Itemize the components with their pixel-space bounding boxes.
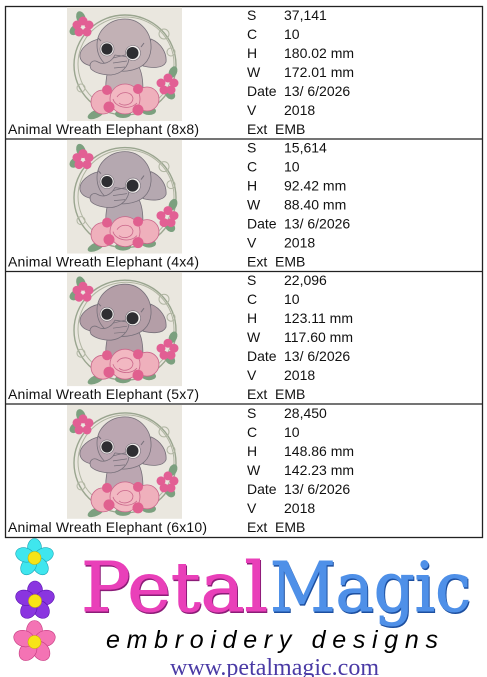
image: elephant wreath 6x10 bbox=[67, 405, 182, 519]
stats: design 6x10: 28,450 bbox=[284, 405, 327, 421]
stats: design 8x8: W bbox=[247, 64, 261, 80]
stats: design 4x4: 92.42 mm bbox=[284, 178, 346, 194]
stats: design 6x10: EMB bbox=[275, 519, 305, 535]
stats: design 8x8: V bbox=[247, 102, 257, 118]
stats: design 8x8: 180.02 mm bbox=[284, 45, 354, 61]
stats: design 4x4: EMB bbox=[275, 254, 305, 270]
logo: PetalMagic wordmark bbox=[81, 549, 471, 628]
stats: design 6x10: C bbox=[247, 424, 257, 440]
stats: design 5x7: S bbox=[247, 272, 256, 288]
stats: design 5x7: W bbox=[247, 329, 261, 345]
image: elephant wreath 5x7 bbox=[67, 272, 182, 387]
stats: design 4x4: Ext bbox=[247, 254, 267, 270]
stats: design 8x8: 37,141 bbox=[284, 7, 327, 23]
stats: design 5x7: 10 bbox=[284, 291, 300, 307]
stats: design 5x7: 22,096 bbox=[284, 272, 327, 288]
image: elephant wreath 4x4 bbox=[67, 140, 182, 254]
stats: design 4x4: Date bbox=[247, 216, 277, 232]
stats: design 6x10: 148.86 mm bbox=[284, 443, 354, 459]
stats: design 4x4 bbox=[247, 140, 350, 270]
panel: row 8x8 bbox=[8, 7, 354, 137]
stats: design 6x10: Ext bbox=[247, 519, 267, 535]
icon: cyan flower bbox=[14, 538, 55, 578]
stats: design 5x7: 2018 bbox=[284, 367, 315, 383]
stats: design 6x10: Date bbox=[247, 481, 277, 497]
stats: design 6x10: 13/ 6/2026 bbox=[284, 481, 350, 497]
stats: design 8x8: 172.01 mm bbox=[284, 64, 354, 80]
panel: row 6x10 bbox=[8, 405, 354, 535]
stats: design 8x8: C bbox=[247, 26, 257, 42]
panel: design table outline bbox=[6, 6, 482, 538]
stats: design 8x8: Ext bbox=[247, 121, 267, 137]
stats: design 5x7: V bbox=[247, 367, 257, 383]
stats: design 5x7: EMB bbox=[275, 386, 305, 402]
stats: design 5x7: Ext bbox=[247, 386, 267, 402]
label: design name 6x10: Animal Wreath Elephant (6x10) bbox=[8, 519, 207, 535]
stats: design 8x8: 10 bbox=[284, 26, 300, 42]
stats: design 5x7: C bbox=[247, 291, 257, 307]
stats: design 8x8 bbox=[247, 7, 354, 137]
stats: design 5x7: 123.11 mm bbox=[284, 310, 353, 326]
label: design name 5x7: Animal Wreath Elephant (5x7) bbox=[8, 386, 199, 402]
stats: design 8x8: 13/ 6/2026 bbox=[284, 83, 350, 99]
icon: pink flower bbox=[12, 620, 57, 664]
stats: design 4x4: W bbox=[247, 197, 261, 213]
icon: purple flower bbox=[14, 581, 56, 622]
stats: design 4x4: V bbox=[247, 235, 257, 251]
panel: row 4x4 bbox=[8, 140, 350, 270]
stats: design 8x8: 2018 bbox=[284, 102, 315, 118]
logo: PetalMagic wordmark: Petal bbox=[81, 549, 268, 628]
stats: design 5x7: H bbox=[247, 310, 257, 326]
image: elephant wreath 8x8 bbox=[67, 7, 182, 121]
stats: design 4x4: 88.40 mm bbox=[284, 197, 346, 213]
stats: design 4x4: 13/ 6/2026 bbox=[284, 216, 350, 232]
stats: design 8x8: S bbox=[247, 7, 256, 23]
panel: row 5x7 bbox=[8, 272, 353, 402]
stats: design 5x7: 13/ 6/2026 bbox=[284, 348, 350, 364]
logo: embroidery designs tagline: embroidery designs bbox=[106, 626, 438, 654]
stats: design 8x8: H bbox=[247, 45, 257, 61]
stats: design 4x4: S bbox=[247, 140, 256, 156]
stats: design 4x4: 15,614 bbox=[284, 140, 327, 156]
stats: design 6x10: 142.23 mm bbox=[284, 462, 354, 478]
stats: design 6x10: 2018 bbox=[284, 500, 315, 516]
stats: design 6x10: V bbox=[247, 500, 257, 516]
stats: design 6x10: H bbox=[247, 443, 257, 459]
label: design name 8x8: Animal Wreath Elephant (8x8) bbox=[8, 121, 199, 137]
stats: design 5x7: Date bbox=[247, 348, 277, 364]
stats: design 4x4: C bbox=[247, 159, 257, 175]
stats: design 6x10: 10 bbox=[284, 424, 300, 440]
stats: design 4x4: 10 bbox=[284, 159, 300, 175]
stats: design 4x4: H bbox=[247, 178, 257, 194]
stats: design 6x10 bbox=[247, 405, 354, 535]
stats: design 6x10: S bbox=[247, 405, 256, 421]
stats: design 8x8: Date bbox=[247, 83, 277, 99]
stats: design 4x4: 2018 bbox=[284, 235, 315, 251]
logo: PetalMagic wordmark: Magic bbox=[270, 549, 471, 628]
label: design name 4x4: Animal Wreath Elephant (4x4) bbox=[8, 254, 199, 270]
stats: design 6x10: W bbox=[247, 462, 261, 478]
stats: design 5x7 bbox=[247, 272, 353, 402]
stats: design 5x7: 117.60 mm bbox=[284, 329, 353, 345]
stats: design 8x8: EMB bbox=[275, 121, 305, 137]
